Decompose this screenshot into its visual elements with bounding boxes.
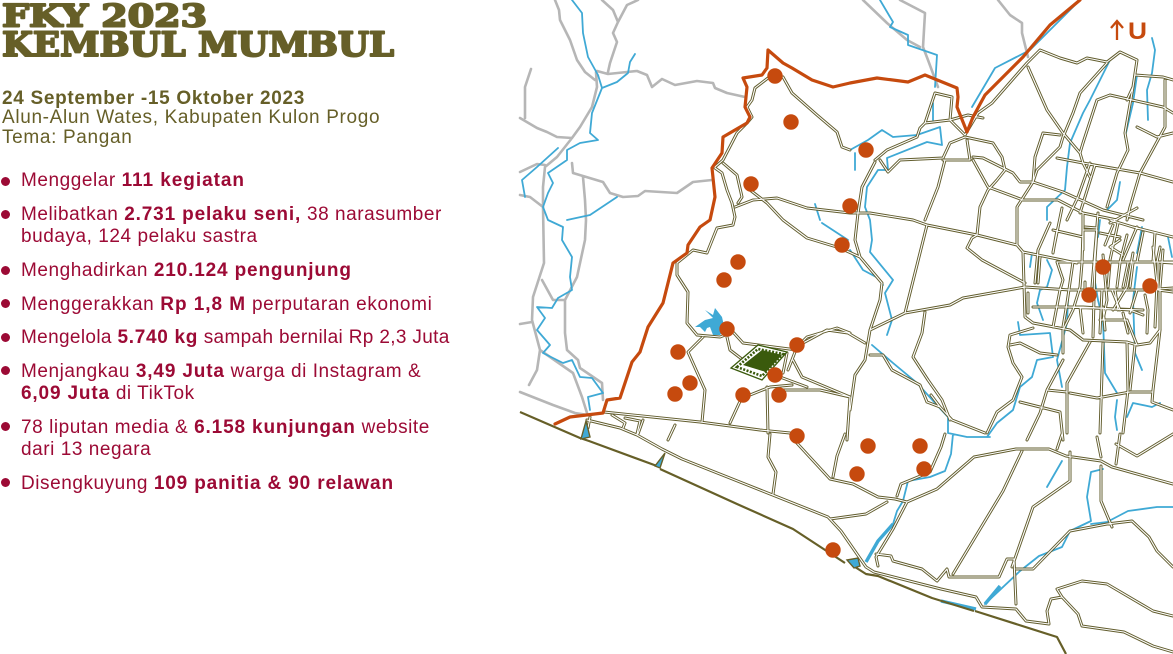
- icon: Alun-Alun Wates square: [731, 345, 787, 380]
- key statistics list: 78 liputan media & 6.158 kunjungan website: [21, 417, 430, 438]
- event date and venue: [2, 88, 380, 148]
- key statistics list: budaya, 124 pelaku sastra: [21, 226, 258, 247]
- reservoir: [695, 308, 725, 335]
- event date and venue: 24 September -15 Oktober 2023: [2, 88, 305, 109]
- rivers: [522, 0, 1173, 609]
- key statistics list: Menggelar 111 kegiatan: [21, 170, 245, 191]
- key statistics list: 6,09 Juta di TikTok: [21, 383, 195, 404]
- title: [2, 0, 394, 65]
- north arrow: [1111, 18, 1147, 45]
- coastline: [520, 412, 1066, 654]
- key statistics list: Disengkuyung 109 panitia & 90 relawan: [21, 473, 394, 494]
- event location dots: [667, 68, 1158, 558]
- Orange regency boundary: [555, 0, 1080, 424]
- key statistics list: [1, 170, 450, 494]
- key statistics list: Menggerakkan Rp 1,8 M perputaran ekonomi: [21, 294, 432, 315]
- key statistics list: Melibatkan 2.731 pelaku seni, 38 narasumber: [21, 204, 442, 225]
- key statistics list: dari 13 negara: [21, 439, 151, 460]
- key statistics list: Mengelola 5.740 kg sampah bernilai Rp 2,3 Juta: [21, 327, 450, 348]
- road network: [587, 50, 1173, 652]
- north arrow: U: [1128, 18, 1147, 45]
- event date and venue: Alun-Alun Wates, Kabupaten Kulon Progo: [2, 107, 380, 128]
- key statistics list: Menghadirkan 210.124 pengunjung: [21, 260, 352, 281]
- event date and venue: Tema: Pangan: [2, 127, 132, 148]
- outer grey roads: [520, 0, 1028, 415]
- key statistics list: Menjangkau 3,49 Juta warga di Instagram &: [21, 361, 421, 382]
- title: KEMBUL MUMBUL: [2, 25, 394, 65]
